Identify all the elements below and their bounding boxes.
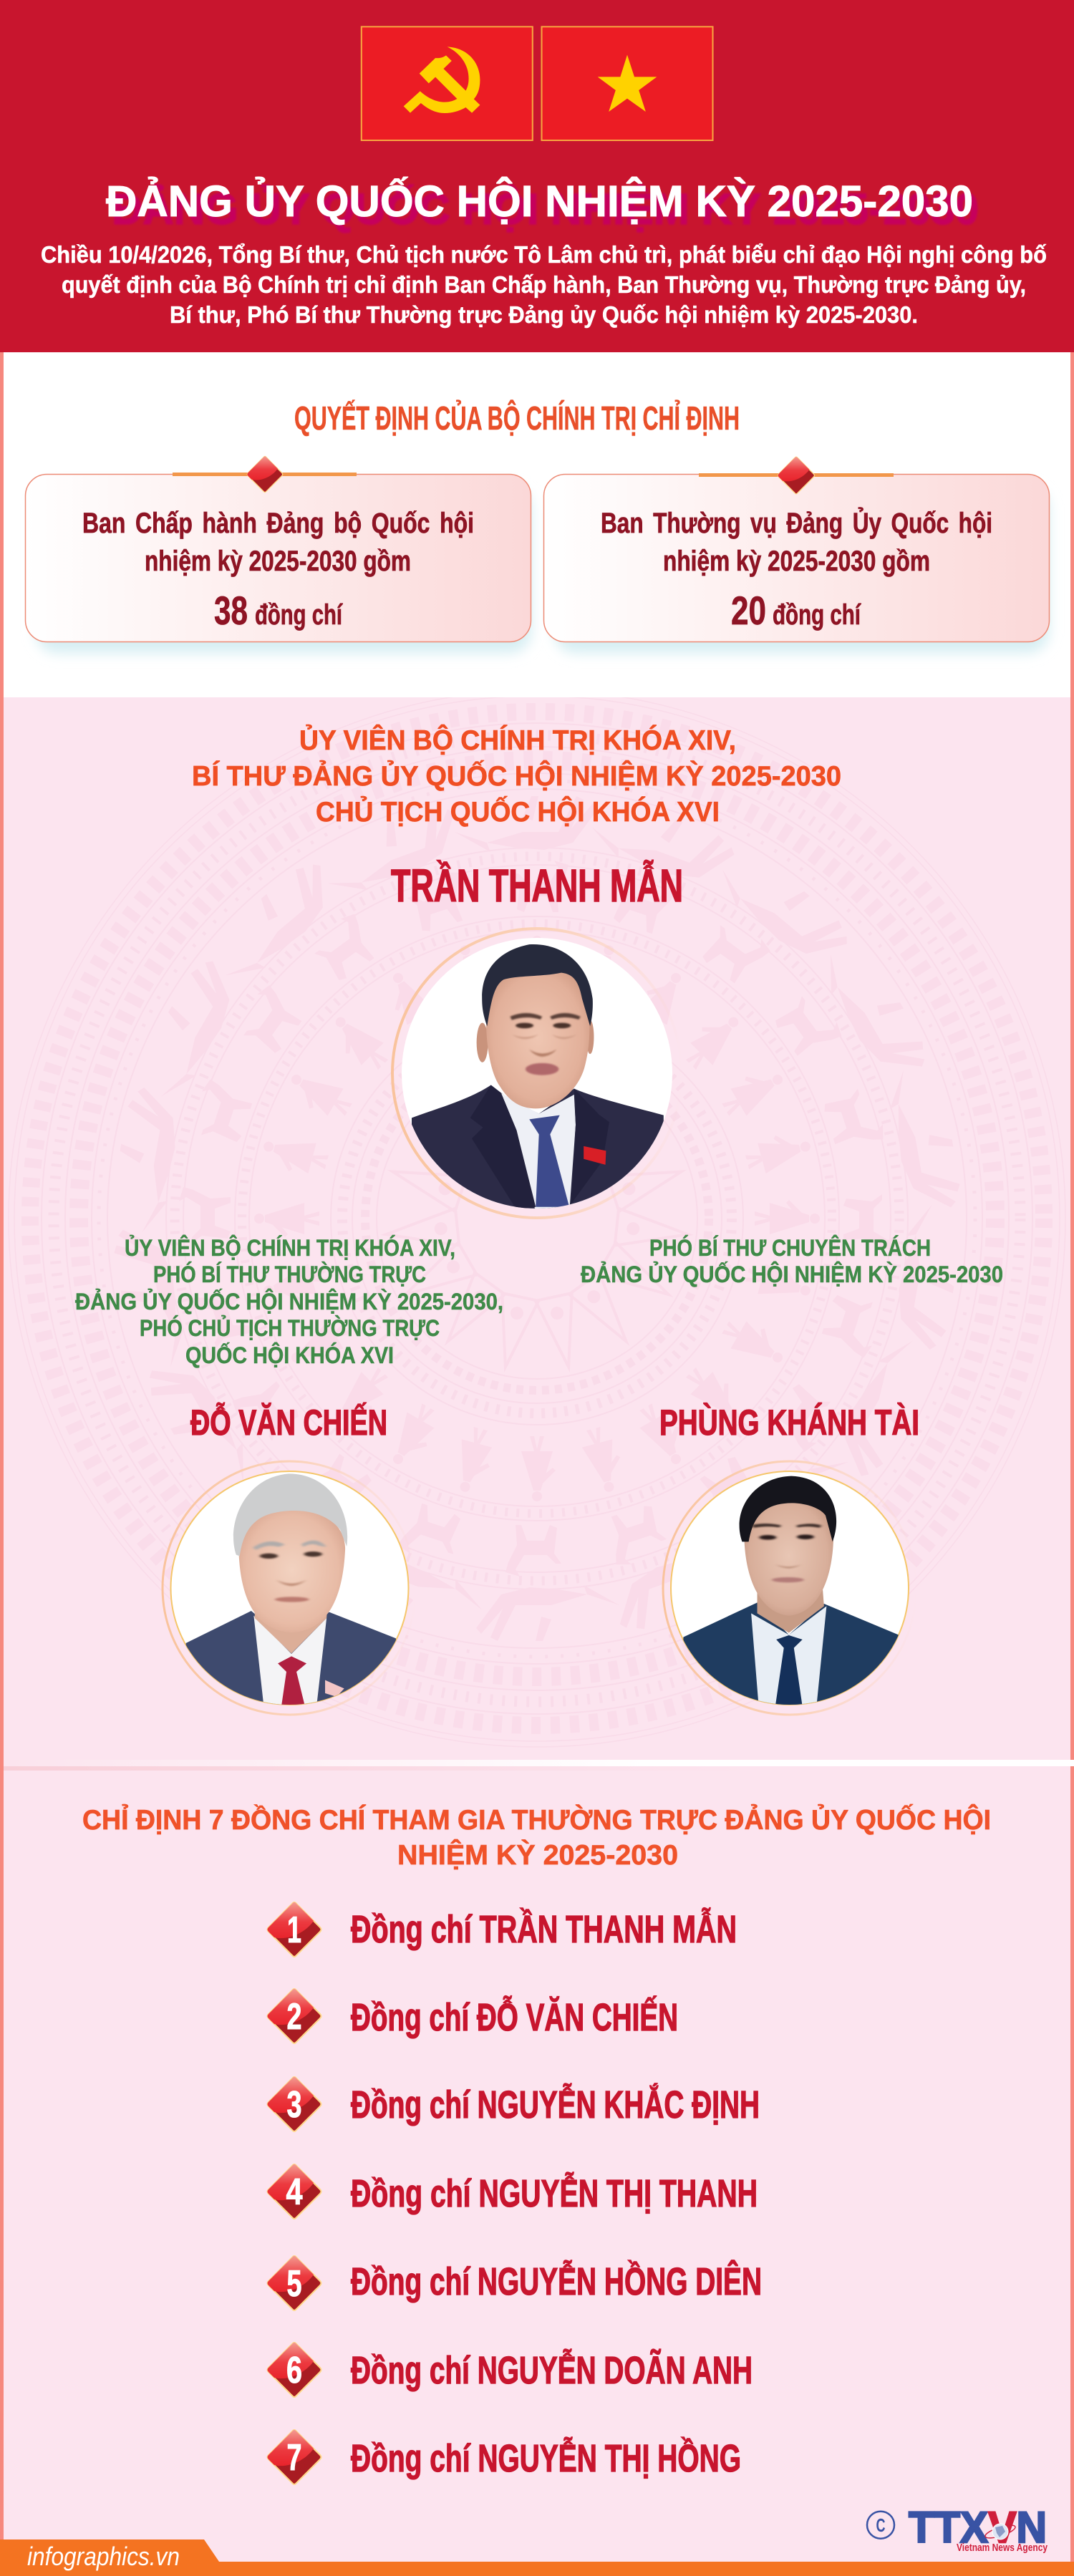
list item 3 <box>268 2077 760 2131</box>
portrait: Đỗ Văn Chiến <box>163 1461 416 1715</box>
footer site name: infographics.vn <box>27 2542 180 2571</box>
divider band <box>4 1760 1074 1771</box>
list item 5: Đồng chí NGUYỄN HỒNG DIÊN <box>351 2260 762 2303</box>
list: standing members <box>268 1902 762 2484</box>
heading: appointed standing members: NHIỆM KỲ 2025-2030 <box>397 1839 678 1871</box>
card text: đồng chí <box>255 599 343 631</box>
icon: party flag <box>362 26 533 140</box>
list item 2 <box>268 1989 678 2043</box>
icon: diamond <box>778 457 815 494</box>
card text: đồng chí <box>773 599 861 631</box>
list item 6: 6 <box>286 2350 302 2391</box>
list item 3: 3 <box>286 2084 302 2126</box>
list item 7: Đồng chí NGUYỄN THỊ HỒNG <box>351 2436 741 2480</box>
logo: TTXVN: TTXVN <box>909 2503 1047 2552</box>
panel: executive committee card <box>26 456 531 653</box>
deputy secretary titles right: PHÓ BÍ THƯ CHUYÊN TRÁCH <box>649 1235 931 1261</box>
list item 1: 1 <box>287 1909 301 1951</box>
heading: secretary title <box>192 724 841 828</box>
list item 7: 7 <box>286 2437 302 2479</box>
card text <box>82 508 474 633</box>
list item 4: Đồng chí NGUYỄN THỊ THANH <box>351 2171 758 2215</box>
footer bar <box>0 2539 1074 2576</box>
list item 2: Đồng chí ĐỖ VĂN CHIẾN <box>351 1995 678 2039</box>
panel: standing committee card <box>544 457 1050 653</box>
deputy secretary titles right <box>581 1235 1003 1287</box>
list item 5: 5 <box>286 2263 302 2305</box>
list item 1: Đồng chí TRẦN THANH MẪN <box>351 1907 737 1951</box>
title: ĐẢNG ỦY QUỐC HỘI NHIỆM KỲ 2025-2030 <box>106 177 973 226</box>
deputy secretary titles left: PHÓ CHỦ TỊCH THƯỜNG TRỰC <box>140 1315 440 1341</box>
card text: 38 <box>214 588 248 633</box>
white content background <box>0 352 1074 697</box>
intro paragraph: quyết định của Bộ Chính trị chỉ định Ban Chấp hành, Ban Thường vụ, Thường trực Đảng ủy, <box>62 271 1026 298</box>
deputy secretary titles right: ĐẢNG ỦY QUỐC HỘI NHIỆM KỲ 2025-2030 <box>581 1262 1003 1287</box>
deputy secretary titles left <box>75 1235 503 1368</box>
icon: diamond <box>247 456 283 493</box>
card text: nhiệm kỳ 2025-2030 gồm <box>663 546 930 577</box>
heading: secretary title: BÍ THƯ ĐẢNG ỦY QUỐC HỘI NHIỆM KỲ 2025-2030 <box>192 760 841 792</box>
heading: appointed standing members: CHỈ ĐỊNH 7 ĐỒNG CHÍ THAM GIA THƯỜNG TRỰC ĐẢNG ỦY QUỐC HỘI <box>82 1803 991 1836</box>
deputy secretary titles left: ỦY VIÊN BỘ CHÍNH TRỊ KHÓA XIV, <box>125 1235 455 1261</box>
list item 4 <box>268 2164 758 2219</box>
list item 4: 4 <box>286 2171 303 2213</box>
heading: appointed standing members <box>82 1803 991 1871</box>
heading: secretary title: CHỦ TỊCH QUỐC HỘI KHÓA XVI <box>316 795 720 828</box>
portrait: Phùng Khánh Tài <box>663 1461 916 1715</box>
name: Đỗ Văn Chiến: ĐỖ VĂN CHIẾN <box>190 1403 387 1443</box>
header panel <box>0 0 1074 352</box>
list item 5 <box>268 2256 762 2310</box>
logo: TTXVN: Vietnam News Agency <box>957 2542 1048 2554</box>
card text: nhiệm kỳ 2025-2030 gồm <box>145 546 411 577</box>
logo: TTXVN: C <box>876 2514 886 2536</box>
list item 6: Đồng chí NGUYỄN DOÃN ANH <box>351 2348 753 2392</box>
deputy secretary titles left: ĐẢNG ỦY QUỐC HỘI NHIỆM KỲ 2025-2030, <box>75 1289 503 1314</box>
icon: national flag <box>542 26 712 140</box>
list item 2: 2 <box>286 1996 302 2038</box>
card text: Ban Chấp hành Đảng bộ Quốc hội <box>82 508 474 539</box>
title shadow: ĐẢNG ỦY QUỐC HỘI NHIỆM KỲ 2025-2030 <box>112 185 979 233</box>
deputy secretary titles left: PHÓ BÍ THƯ THƯỜNG TRỰC <box>153 1262 426 1287</box>
deputy secretary titles left: QUỐC HỘI KHÓA XVI <box>185 1342 394 1368</box>
list item 1 <box>268 1902 737 1957</box>
card text <box>601 506 992 633</box>
intro paragraph: Bí thư, Phó Bí thư Thường trực Đảng ủy Quốc hội nhiệm kỳ 2025-2030. <box>170 301 918 328</box>
pink background panel <box>0 697 1074 2562</box>
name: Phùng Khánh Tài: PHÙNG KHÁNH TÀI <box>659 1403 919 1443</box>
heading: secretary title: ỦY VIÊN BỘ CHÍNH TRỊ KHÓA XIV, <box>299 724 736 756</box>
portrait: Trần Thanh Mẫn <box>392 929 682 1218</box>
bronze drum background pattern <box>9 690 1065 1747</box>
intro paragraph <box>41 241 1047 328</box>
list item 6 <box>268 2343 753 2397</box>
name: Trần Thanh Mẫn: TRẦN THANH MẪN <box>391 860 683 911</box>
card text: 20 <box>731 588 766 633</box>
list item 3: Đồng chí NGUYỄN KHẮC ĐỊNH <box>351 2083 760 2126</box>
list item 7 <box>268 2430 741 2484</box>
heading: politburo decision: QUYẾT ĐỊNH CỦA BỘ CHÍNH TRỊ CHỈ ĐỊNH <box>294 400 740 437</box>
